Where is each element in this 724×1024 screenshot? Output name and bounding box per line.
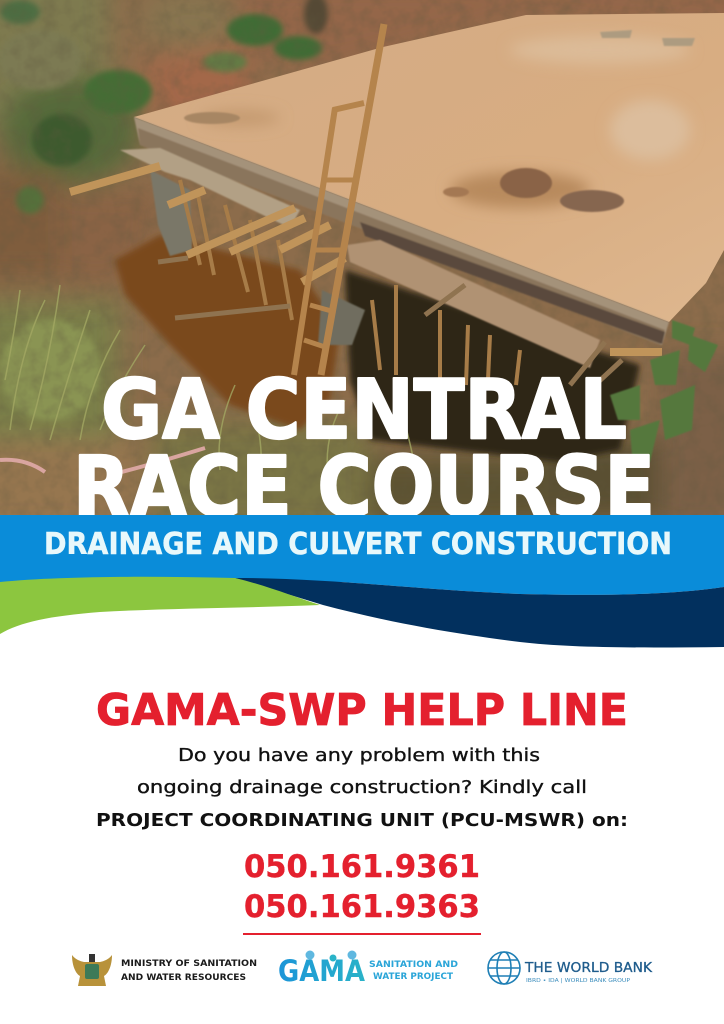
helpline heading: GAMA-SWP HELP LINE	[96, 685, 628, 736]
slab edge and rough formwork	[120, 117, 669, 368]
logo text: ministry: AND WATER RESOURCES	[121, 973, 246, 983]
helpline instructions: PROJECT COORDINATING UNIT (PCU-MSWR) on:	[96, 811, 628, 831]
wave: white cut	[0, 582, 724, 660]
concrete pier walls	[150, 170, 365, 345]
title: RACE COURSE	[73, 438, 655, 536]
banner subtitle: DRAINAGE AND CULVERT CONSTRUCTION	[44, 527, 672, 562]
photo: culvert construction site	[0, 0, 724, 536]
grass and plants foreground	[0, 285, 718, 490]
phone numbers: 050.161.9363	[244, 889, 480, 925]
helpline instructions: ongoing drainage construction? Kindly call	[137, 777, 587, 798]
logo text: ministry	[121, 959, 257, 983]
water pool	[115, 235, 340, 430]
logo text: the world bank: IBRD • IDA | WORLD BANK GROUP	[526, 978, 631, 984]
title	[78, 376, 651, 515]
wave: blue upper edge	[0, 575, 724, 595]
helpline instructions: Do you have any problem with this	[178, 745, 540, 766]
helpline instructions	[96, 745, 628, 831]
wave: green	[0, 577, 320, 634]
title: GA CENTRAL	[101, 363, 627, 458]
logo text: the world bank	[524, 960, 653, 984]
logo text: sanitation and water project: WATER PROJECT	[373, 972, 453, 982]
concrete slab	[134, 13, 724, 322]
ground and vegetation	[0, 0, 724, 530]
blue banner	[0, 515, 724, 600]
logo: World Bank globe	[488, 952, 520, 984]
timber props and planks	[70, 166, 662, 385]
wave: navy	[235, 578, 724, 647]
logo: Ghana coat of arms	[72, 954, 112, 986]
dark underside of culvert	[345, 270, 640, 462]
logo text: sanitation and water project	[369, 960, 458, 982]
phone numbers	[244, 849, 480, 925]
logo text: sanitation and water project: SANITATION AND	[369, 960, 458, 970]
logo text: ministry: MINISTRY OF SANITATION	[121, 959, 257, 969]
wooden ladder	[294, 24, 384, 375]
phone numbers: 050.161.9361	[244, 849, 480, 885]
logo: GAMA: GAMA	[278, 954, 365, 988]
logo text: the world bank: THE WORLD BANK	[524, 960, 653, 976]
